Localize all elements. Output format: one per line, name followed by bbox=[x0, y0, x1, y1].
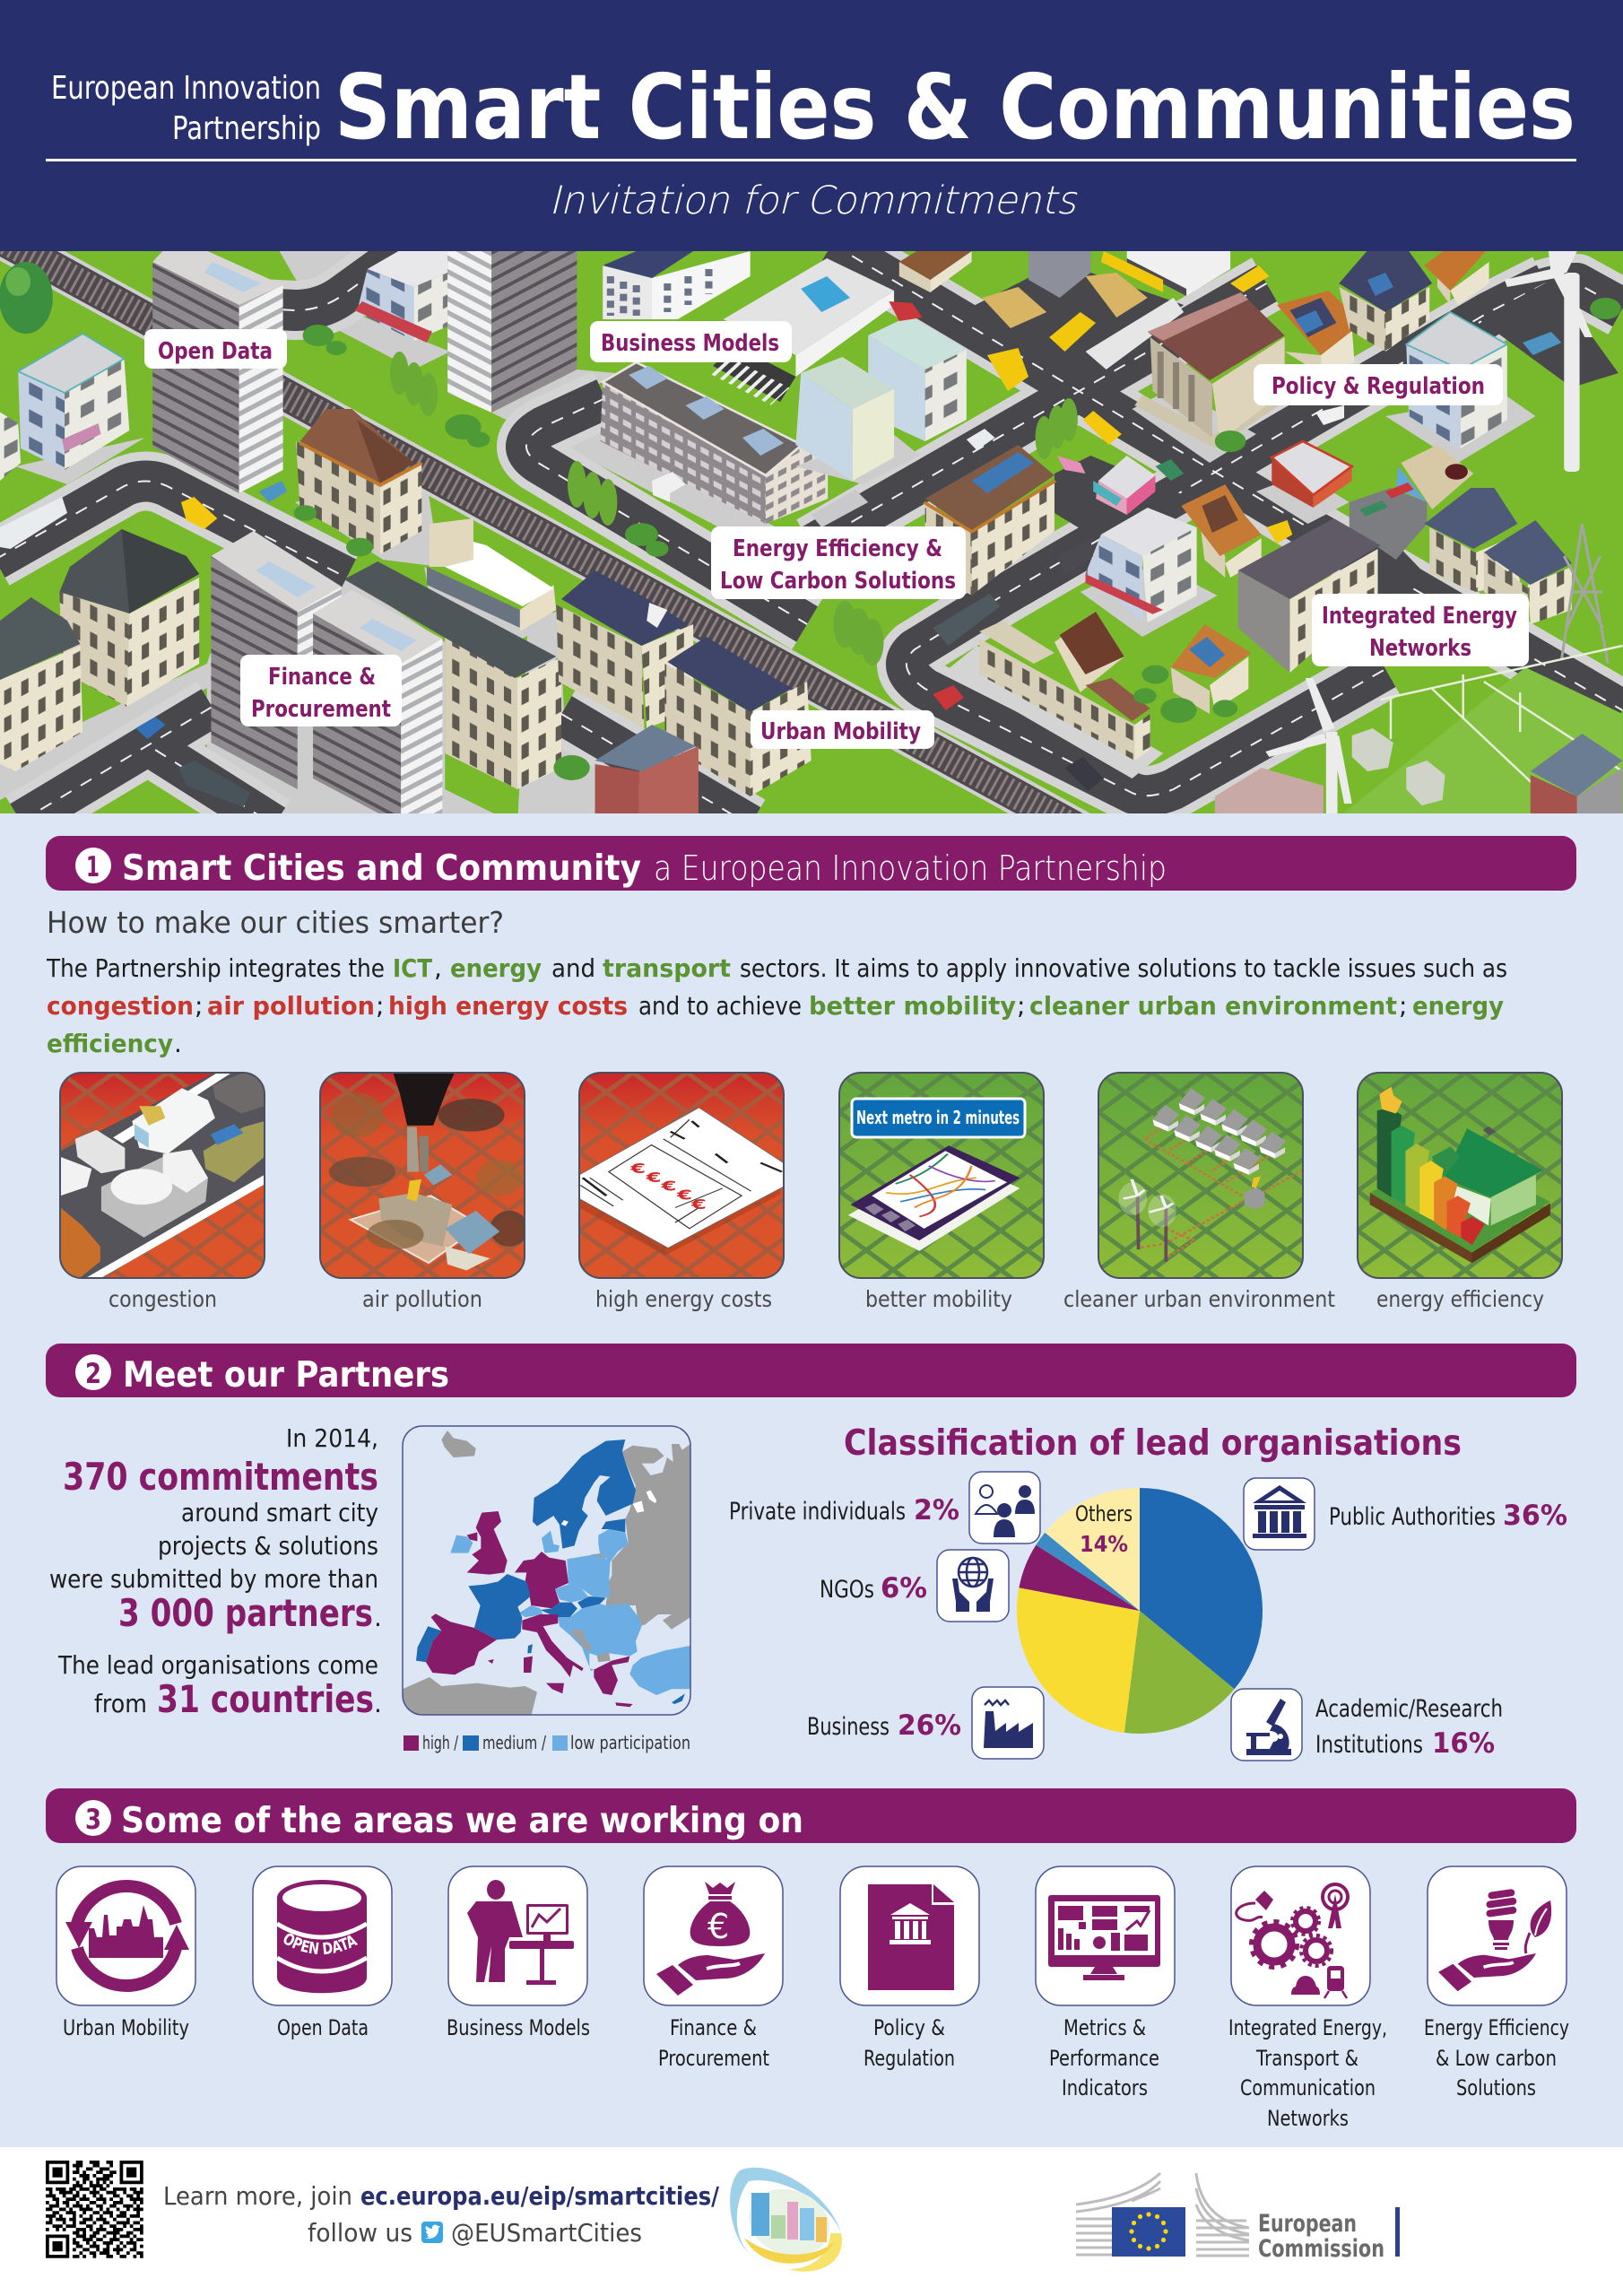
label: Energy Efficiency & Low Carbon Solutions: Energy Efficiency & bbox=[733, 535, 942, 562]
learn more text bbox=[163, 2181, 720, 2248]
tile: high energy costs: € bbox=[676, 1187, 692, 1203]
legend: Academic/Research Institutions: Academic/Research bbox=[1315, 1695, 1503, 1723]
card: Urban Mobility: Urban Mobility bbox=[63, 2015, 189, 2040]
map legend: medium / bbox=[482, 1732, 546, 1753]
tower B bbox=[447, 251, 577, 413]
tile captions: high energy costs bbox=[595, 1286, 772, 1312]
commitments text: 370 commitments bbox=[63, 1455, 378, 1499]
intro paragraph: air pollution bbox=[207, 991, 375, 1021]
label: Integrated Energy Networks: Integrated Energy bbox=[1322, 603, 1517, 630]
tagline: Invitation for Commitments bbox=[549, 178, 1078, 223]
car sales lot bbox=[1350, 445, 1473, 560]
question heading: How to make our cities smarter? bbox=[47, 905, 504, 940]
tile captions: air pollution bbox=[362, 1286, 482, 1312]
intro paragraph: cleaner urban environment bbox=[1029, 991, 1397, 1021]
label: Urban Mobility bbox=[751, 710, 934, 749]
label: Policy & Regulation: Policy & Regulation bbox=[1271, 373, 1485, 400]
vehicles right bbox=[812, 265, 1561, 791]
tile: high energy costs: € bbox=[646, 1170, 662, 1186]
tile captions: better mobility bbox=[865, 1286, 1012, 1312]
card: Integrated Energy, Transport & Communication Networks: Networks bbox=[1267, 2106, 1349, 2131]
intro paragraph: efficiency bbox=[47, 1029, 173, 1058]
intro paragraph: transport bbox=[603, 953, 731, 983]
tile: cleaner urban environment bbox=[1098, 1073, 1303, 1278]
tile captions bbox=[108, 1286, 1544, 1312]
subtitle: European Innovation Partnership bbox=[51, 70, 321, 147]
legend: Academic/Research Institutions: 16% bbox=[1432, 1727, 1495, 1760]
intro paragraph: ; bbox=[1399, 991, 1407, 1021]
isometric city illustration bbox=[0, 230, 1623, 839]
intro paragraph: and to achieve bbox=[638, 991, 802, 1021]
top white building bbox=[603, 251, 751, 319]
label: Open Data: Open Data bbox=[158, 338, 273, 365]
commitments text: from bbox=[94, 1689, 147, 1718]
tile: better mobility bbox=[839, 1073, 1044, 1278]
wind turbine bottom bbox=[1265, 678, 1352, 825]
label: Energy Efficiency & Low Carbon Solutions bbox=[711, 526, 966, 599]
logo: European Commission bbox=[1076, 2173, 1400, 2263]
intro paragraph: and bbox=[551, 953, 595, 983]
roads bbox=[0, 244, 1622, 825]
orange house bbox=[1171, 624, 1251, 714]
map of Europe bbox=[403, 1426, 690, 1716]
card: Policy & Regulation: Regulation bbox=[864, 2046, 955, 2071]
intro paragraph: congestion bbox=[47, 991, 194, 1021]
legend: Business bbox=[807, 1687, 1044, 1759]
plazas bbox=[0, 251, 777, 825]
learn more text: follow us bbox=[308, 2218, 412, 2248]
QR code bbox=[46, 2162, 143, 2257]
commitments text: 3 000 partners bbox=[118, 1591, 373, 1635]
card: Policy & Regulation: Policy & bbox=[873, 2015, 945, 2040]
legend: NGOs: 6% bbox=[881, 1572, 927, 1605]
section 2 panel bbox=[46, 1344, 1576, 1761]
intro paragraph: sectors. It aims to apply innovative solutions to tackle issues such as bbox=[740, 953, 1507, 983]
tile captions: cleaner urban environment bbox=[1063, 1286, 1335, 1312]
vehicles left bbox=[0, 481, 287, 807]
classic building far left bbox=[0, 597, 82, 771]
card: Integrated Energy, Transport & Communication Networks bbox=[1228, 1866, 1387, 2131]
commitments text: In 2014, bbox=[286, 1423, 378, 1453]
tile captions: energy efficiency bbox=[1376, 1286, 1544, 1312]
legend: Private individuals: 2% bbox=[914, 1494, 959, 1526]
top cafe building bbox=[354, 251, 447, 343]
legend: Academic/Research Institutions bbox=[1231, 1689, 1503, 1761]
wind turbine top bbox=[1505, 251, 1593, 472]
card: Urban Mobility bbox=[56, 1866, 195, 2040]
section 1 heading bar: a European Innovation Partnership bbox=[654, 848, 1167, 888]
chart title: Classification of lead organisations bbox=[844, 1423, 1462, 1464]
commitments text: The lead organisations come bbox=[57, 1650, 378, 1680]
red brick building bbox=[595, 725, 699, 813]
legend: Business: 26% bbox=[898, 1709, 961, 1742]
pie label: Others bbox=[1075, 1501, 1133, 1557]
intro paragraph: ICT bbox=[393, 953, 432, 983]
card: Integrated Energy, Transport & Communication Networks: Communication bbox=[1240, 2075, 1376, 2100]
card: Integrated Energy, Transport & Communication Networks: Integrated Energy, bbox=[1228, 2015, 1387, 2040]
tile: congestion bbox=[60, 1073, 265, 1278]
label: Finance & Procurement: Finance & bbox=[268, 664, 376, 691]
learn more text: Learn more, join bbox=[163, 2181, 352, 2211]
subtitle: European Innovation Partnership: European Innovation bbox=[51, 70, 321, 107]
section 1 heading bar: Smart Cities and Community bbox=[122, 848, 641, 889]
card: Finance & Procurement: € bbox=[707, 1907, 729, 1946]
subtitle: European Innovation Partnership: Partnership bbox=[172, 110, 321, 147]
label: Integrated Energy Networks: Networks bbox=[1369, 635, 1471, 662]
commitments text: projects & solutions bbox=[158, 1531, 378, 1561]
legend: Public Authorities: 36% bbox=[1503, 1500, 1567, 1532]
map legend: low participation bbox=[570, 1732, 690, 1753]
legend: NGOs bbox=[820, 1550, 1009, 1622]
label: Integrated Energy Networks bbox=[1312, 594, 1529, 666]
label: Business Models bbox=[590, 321, 792, 362]
learn more text: @EUSmartCities bbox=[451, 2218, 642, 2248]
commitments text bbox=[49, 1423, 382, 1721]
solar house row top bbox=[1277, 291, 1354, 364]
label: Finance & Procurement bbox=[240, 655, 402, 726]
section 3 heading bar: Some of the areas we are working on bbox=[121, 1801, 803, 1841]
commitments text: were submitted by more than bbox=[49, 1564, 378, 1594]
card: Metrics & Performance Indicators: Performance bbox=[1049, 2046, 1159, 2071]
legend: Public Authorities: Public Authorities bbox=[1329, 1503, 1496, 1531]
card: Open Data bbox=[252, 1866, 393, 2040]
card: Energy Efficiency & Low carbon Solutions bbox=[1424, 1866, 1569, 2100]
power substation bbox=[1352, 646, 1622, 811]
tower A bbox=[152, 237, 283, 493]
label: Finance & Procurement: Procurement bbox=[251, 696, 391, 723]
map legend: high / bbox=[422, 1732, 458, 1753]
pie label: Others: 14% bbox=[1080, 1531, 1128, 1557]
card: Open Data: OPEN DATA bbox=[283, 1934, 359, 1955]
apartment U bbox=[1086, 508, 1197, 622]
navy-roof houses bbox=[1424, 488, 1572, 624]
section 1 panel bbox=[46, 836, 1576, 1312]
header banner bbox=[0, 0, 1623, 251]
map legend bbox=[404, 1732, 690, 1753]
card: Business Models: Business Models bbox=[447, 2015, 590, 2040]
business building bbox=[600, 362, 828, 524]
cream station house bbox=[979, 612, 1150, 761]
card: Finance & Procurement: Procurement bbox=[658, 2046, 769, 2071]
card: Policy & Regulation bbox=[840, 1866, 979, 2071]
top house bbox=[898, 251, 972, 292]
legend: Private individuals: Private individuals bbox=[729, 1498, 906, 1526]
rail station bbox=[427, 518, 556, 631]
classic building left bbox=[59, 529, 199, 707]
intro paragraph: The Partnership integrates the bbox=[46, 953, 385, 983]
intro paragraph: better mobility bbox=[809, 991, 1016, 1021]
edge apartment bbox=[0, 409, 21, 481]
left apartment bbox=[18, 334, 129, 470]
temple bbox=[1134, 292, 1285, 448]
red shop bbox=[1271, 441, 1352, 508]
legend: Private individuals bbox=[729, 1472, 1040, 1544]
legend: Academic/Research Institutions: Institutions bbox=[1315, 1731, 1423, 1759]
pool building bbox=[713, 258, 894, 402]
commitments text: . bbox=[374, 1689, 382, 1718]
intro paragraph: . bbox=[174, 1029, 182, 1058]
intro paragraph: high energy costs bbox=[388, 991, 628, 1021]
logo: smart city globe bbox=[730, 2168, 842, 2272]
section 1 heading bar: 1 bbox=[86, 851, 100, 883]
logo: European Commission: European bbox=[1258, 2210, 1357, 2238]
delivery trucks bbox=[987, 298, 1184, 391]
pink shop bbox=[1057, 456, 1155, 515]
finance tower 1 bbox=[211, 531, 342, 789]
card: Energy Efficiency & Low carbon Solutions: & Low carbon bbox=[1436, 2046, 1557, 2071]
trees and bushes right bbox=[834, 298, 1621, 723]
intro paragraph: ; bbox=[1017, 991, 1025, 1021]
legend: Business: Business bbox=[807, 1713, 890, 1741]
section 3 heading bar bbox=[46, 1788, 1576, 1843]
legend: NGOs: NGOs bbox=[820, 1576, 874, 1604]
card: Metrics & Performance Indicators: Indicators bbox=[1062, 2075, 1148, 2100]
railway bbox=[0, 239, 1097, 839]
section 2 heading bar: Meet our Partners bbox=[123, 1355, 449, 1396]
intro paragraph: , bbox=[434, 953, 442, 983]
intro paragraph bbox=[46, 953, 1507, 1058]
card: Metrics & Performance Indicators: Metrics & bbox=[1063, 2015, 1146, 2040]
right half of the city bbox=[713, 248, 1622, 825]
finance tower 2 bbox=[313, 590, 442, 825]
section 3 panel bbox=[46, 1788, 1576, 2131]
card: Integrated Energy, Transport & Communication Networks: Transport & bbox=[1255, 2046, 1358, 2071]
label: Urban Mobility: Urban Mobility bbox=[760, 718, 921, 745]
navy roof building J bbox=[556, 570, 693, 728]
label: Business Models: Business Models bbox=[601, 330, 779, 357]
intro paragraph: energy bbox=[1412, 991, 1504, 1021]
tile captions: congestion bbox=[108, 1286, 217, 1312]
tile: high energy costs bbox=[577, 1073, 784, 1278]
storage building and sign bbox=[1101, 248, 1230, 296]
card: Finance & Procurement: Finance & bbox=[670, 2015, 757, 2040]
commitments text: . bbox=[374, 1603, 382, 1632]
tile: high energy costs: € bbox=[690, 1196, 707, 1213]
city labels bbox=[144, 321, 1529, 749]
logo: European Commission: Commission bbox=[1258, 2235, 1384, 2263]
big tree bbox=[0, 262, 53, 334]
glass tower bbox=[1028, 248, 1090, 298]
dark-roof building bbox=[1238, 518, 1380, 673]
card: Energy Efficiency & Low carbon Solutions: Solutions bbox=[1456, 2075, 1536, 2100]
trees and bushes bbox=[294, 325, 668, 780]
legend: Public Authorities bbox=[1244, 1478, 1567, 1550]
label: Policy & Regulation bbox=[1254, 364, 1503, 405]
pink building bbox=[1215, 768, 1324, 825]
section 3 heading bar: 3 bbox=[85, 1804, 101, 1836]
section 2 heading bar: 2 bbox=[85, 1358, 101, 1390]
pie chart bbox=[1017, 1488, 1263, 1734]
section 2 heading bar bbox=[46, 1344, 1576, 1397]
tile: energy efficiency bbox=[1358, 1073, 1562, 1278]
warehouse crates bbox=[982, 273, 1148, 328]
brown house V bbox=[1181, 484, 1262, 578]
tile: better mobility: Next metro in 2 minutes bbox=[856, 1107, 1020, 1128]
intro paragraph: ; bbox=[195, 991, 203, 1021]
commitments text: 31 countries bbox=[157, 1677, 374, 1721]
tile: high energy costs: € bbox=[629, 1161, 646, 1177]
learn more text: ec.europa.eu/eip/smartcities/ bbox=[360, 2181, 720, 2211]
electricity pylon bbox=[1561, 524, 1608, 664]
red building bottom right bbox=[1531, 734, 1622, 825]
pale apartments bbox=[868, 316, 967, 441]
apartment R bbox=[1406, 312, 1507, 448]
pie label: Others: Others bbox=[1075, 1501, 1133, 1526]
footer bbox=[0, 2147, 1623, 2296]
tile: high energy costs: € bbox=[660, 1178, 677, 1194]
card: Metrics & Performance Indicators bbox=[1036, 1866, 1175, 2100]
card: Finance & Procurement bbox=[644, 1866, 783, 2071]
card: Energy Efficiency & Low carbon Solutions: Energy Efficiency bbox=[1424, 2015, 1569, 2040]
card: Business Models bbox=[447, 1866, 590, 2040]
tile: air pollution bbox=[320, 1073, 528, 1278]
label: Energy Efficiency & Low Carbon Solutions: Low Carbon Solutions bbox=[720, 568, 956, 595]
solar building S bbox=[924, 445, 1055, 596]
section 1 heading bar bbox=[46, 836, 1576, 891]
intro paragraph: energy bbox=[450, 953, 542, 983]
long grey building bbox=[344, 561, 561, 789]
intro paragraph: ; bbox=[376, 991, 384, 1021]
commitments text: around smart city bbox=[181, 1498, 378, 1527]
label: Open Data bbox=[144, 329, 287, 369]
card: Open Data: Open Data bbox=[277, 2015, 369, 2040]
icon: twitter bbox=[421, 2222, 443, 2243]
navy roof building K bbox=[664, 637, 812, 796]
brown-roof palace bbox=[296, 409, 421, 554]
